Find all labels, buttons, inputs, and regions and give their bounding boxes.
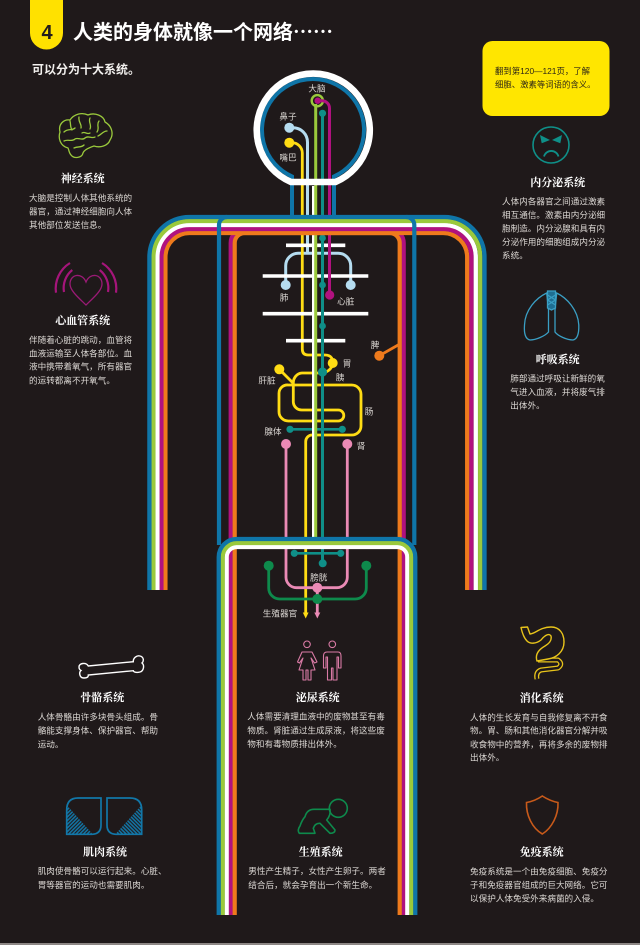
- nervous line and brain: [312, 95, 323, 538]
- panel: respiratory system: [510, 291, 605, 411]
- panel: cardiovascular system: [29, 263, 133, 385]
- panel: nervous system: [29, 114, 133, 230]
- body text: [470, 711, 608, 763]
- organ labels: 肝脏: [258, 374, 276, 386]
- icon: crawling baby: [298, 799, 347, 833]
- organ labels: [258, 82, 380, 618]
- heading: 泌尿系统: [296, 690, 341, 704]
- body text: 出体外。: [510, 400, 545, 411]
- panel: digestive system: [470, 627, 608, 763]
- body text: 免疫系统是一个由免疫细胞、免疫分: [470, 866, 608, 877]
- heading: 骨骼系统: [80, 690, 125, 704]
- head outline: [262, 79, 364, 217]
- panel: immune system: [470, 796, 608, 903]
- cardiovascular line and heart: [314, 98, 334, 300]
- body text: [510, 373, 605, 411]
- heading: 呼吸系统: [536, 352, 581, 366]
- organ labels: 胰: [336, 372, 345, 382]
- body text: 以保护人体免受外来病菌的入侵。: [470, 892, 599, 903]
- body text: 物和有毒物质排出体外。: [247, 738, 342, 749]
- hips and legs: [219, 539, 415, 915]
- organ labels: 肺: [280, 292, 289, 302]
- urinary line: kidneys and bladder: [281, 439, 352, 618]
- icon: woman and man: [298, 641, 341, 680]
- organ labels: 膀胱: [310, 572, 328, 582]
- body text: 收食物中的营养，再将多余的废物排: [470, 738, 608, 749]
- organ labels: 肠: [365, 406, 374, 416]
- body text: 出体外。: [470, 752, 504, 763]
- body text: 人体内各器官之间通过激素: [502, 196, 606, 207]
- panel: reproductive system: [248, 799, 386, 890]
- spine: [312, 186, 315, 538]
- body text: 肌肉使骨骼可以运行起来。心脏、: [38, 865, 167, 876]
- organ labels: 嘴巴: [279, 152, 297, 162]
- organ labels: 鼻子: [279, 110, 297, 122]
- body text: [502, 196, 606, 260]
- panel: skeletal system: [38, 656, 158, 749]
- icon: angry face: [533, 127, 569, 163]
- heading: 内分泌系统: [530, 175, 586, 189]
- reproductive line: [264, 561, 371, 604]
- body text: 运动。: [38, 739, 63, 749]
- heading: 肌肉系统: [83, 845, 128, 859]
- torso inner loops: [231, 229, 404, 915]
- body text: 大脑是控制人体其他系统的: [29, 192, 132, 203]
- organ labels: 生殖器官: [263, 608, 297, 618]
- icon: muscles: [67, 798, 142, 834]
- shoulders and arms: [149, 217, 484, 590]
- heading: 生殖系统: [299, 845, 344, 859]
- body text: 肺部通过呼吸让新鲜的氧: [510, 373, 605, 384]
- organ labels: 腺体: [264, 426, 282, 436]
- body text: [29, 334, 133, 385]
- icon: brain: [59, 114, 112, 157]
- organ labels: 肾: [357, 441, 366, 451]
- panel: urinary system: [247, 641, 385, 749]
- head ring: [257, 74, 370, 182]
- organ labels: 心脏: [337, 296, 355, 306]
- organ labels: 脾: [371, 339, 380, 350]
- body text: 气进入血液，并将废气排: [510, 386, 605, 397]
- icon: shield: [526, 796, 558, 834]
- body text: 的运转都离不开氧气。: [29, 374, 115, 385]
- body text: 其他部位发送信息。: [29, 219, 106, 230]
- body text: 伴随着心脏的跳动，血管将: [29, 334, 133, 345]
- panel: muscular system: [38, 798, 167, 890]
- respiratory line: nose and lungs: [281, 123, 356, 290]
- body network diagram: [149, 74, 484, 915]
- spleen branch: [374, 344, 399, 361]
- body text: 分泌作用的细胞组成内分泌: [502, 236, 606, 247]
- body text: 子和免疫器官组成的巨大网络。它可: [470, 879, 608, 890]
- body text: 胞制造。内分泌腺和具有内: [502, 222, 605, 234]
- body text: 胃等器官的运动也需要肌肉。: [38, 879, 149, 890]
- panel: endocrine system: [502, 127, 606, 260]
- body text: 系统。: [502, 250, 528, 260]
- body text: 结合后，就会孕育出一个新生命。: [248, 879, 377, 890]
- body text: 血液运输至人体各部位。血: [29, 347, 133, 358]
- callout: glossary note: 细胞、激素等词语的含义。: [495, 80, 596, 90]
- body text: 相互通信。激素由内分泌细: [502, 209, 605, 220]
- subtitle: 可以分为十大系统。: [32, 62, 140, 76]
- callout: glossary note: 翻到第120—121页，了解: [495, 66, 591, 76]
- heading: 心血管系统: [55, 313, 111, 327]
- body text: 物质。肾脏通过生成尿液，将这些废: [247, 724, 385, 735]
- body text: 物。胃、肠和其他消化器官分解并吸: [470, 725, 608, 736]
- heading: 免疫系统: [520, 845, 565, 859]
- organ labels: 大脑: [308, 82, 326, 94]
- callout: glossary note: [482, 41, 610, 116]
- icon: beating heart: [56, 263, 116, 305]
- body text: [248, 865, 386, 890]
- icon: stomach and intestine: [521, 627, 564, 679]
- body text: [38, 711, 158, 749]
- icon: lungs: [524, 291, 579, 340]
- body text: [247, 711, 385, 749]
- body text: 液中携带着氧气，所有器官: [29, 361, 132, 372]
- endocrine line and glands: [286, 110, 346, 567]
- body text: 器官，通过神经细胞向人体: [29, 206, 133, 217]
- torso muscle lines: [219, 217, 414, 545]
- body text: [29, 192, 133, 230]
- digestive line: mouth, stomach, liver, intestine: [274, 138, 361, 618]
- heading: 消化系统: [520, 690, 565, 704]
- body text: 人体骨骼由许多块骨头组成。骨: [38, 711, 158, 722]
- heading: 神经系统: [61, 171, 106, 185]
- body text: [38, 865, 167, 890]
- ribs: [263, 245, 368, 341]
- body text: 人体的生长发育与自我修复离不开食: [470, 711, 608, 722]
- icon: bone: [79, 656, 144, 678]
- title: 人类的身体就像一个网络……: [73, 16, 333, 45]
- body text: 男性产生精子，女性产生卵子。两者: [248, 865, 386, 876]
- page number tab: 4: [41, 22, 53, 44]
- body text: [470, 866, 608, 903]
- page number tab: [30, 0, 63, 50]
- body text: 人体需要清理血液中的废物甚至有毒: [247, 711, 385, 722]
- body text: 骼能支撑身体、保护器官、帮助: [38, 724, 158, 735]
- organ labels: 胃: [343, 358, 351, 368]
